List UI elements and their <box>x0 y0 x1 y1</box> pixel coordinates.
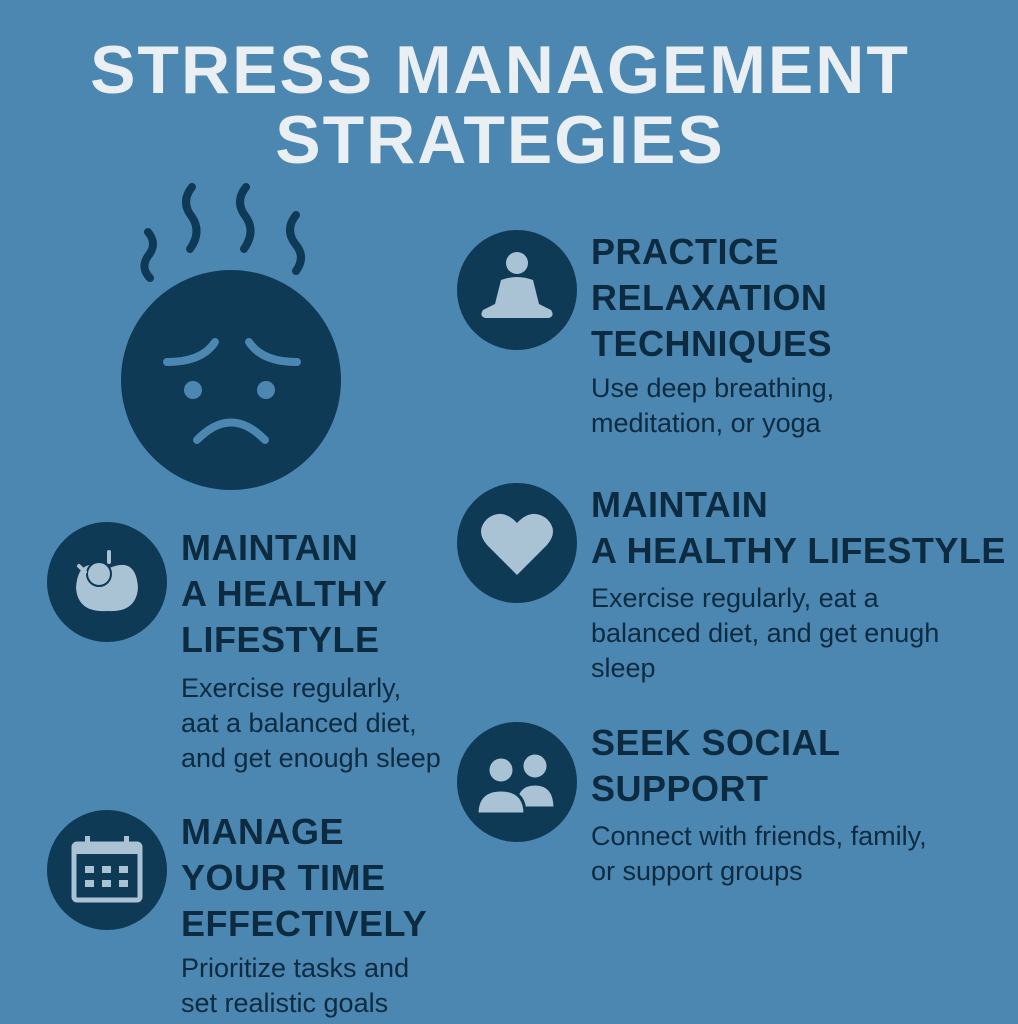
heading: TECHNIQUES <box>591 323 832 364</box>
heading: EFFECTIVELY <box>181 903 427 944</box>
icon: apple <box>47 522 167 642</box>
description: sleep <box>591 653 656 683</box>
description: balanced diet, and get enugh <box>591 618 939 648</box>
heading <box>181 527 388 660</box>
heading: SEEK SOCIAL <box>591 722 841 763</box>
icon: people <box>457 722 577 842</box>
title: STRATEGIES <box>275 102 725 178</box>
heading <box>181 811 427 944</box>
heading: PRACTICE <box>591 231 779 272</box>
heading: SUPPORT <box>591 768 769 809</box>
heading: A HEALTHY LIFESTYLE <box>591 530 1006 571</box>
heading: LIFESTYLE <box>181 619 380 660</box>
heading <box>591 722 841 809</box>
heading: A HEALTHY <box>181 573 388 614</box>
description: Use deep breathing, <box>591 373 834 403</box>
description: Exercise regularly, eat a <box>591 583 879 613</box>
description: Connect with friends, family, <box>591 821 927 851</box>
heading: MANAGE <box>181 811 344 852</box>
section: healthy lifestyle left <box>181 527 441 773</box>
description <box>591 821 927 886</box>
title <box>90 32 910 178</box>
description <box>591 373 834 438</box>
section: healthy lifestyle right <box>591 484 1006 683</box>
description: or support groups <box>591 856 803 886</box>
description: meditation, or yoga <box>591 408 821 438</box>
description <box>591 583 939 683</box>
icon: stressed face <box>121 183 341 490</box>
section: practice relaxation <box>591 231 834 438</box>
section: manage time <box>181 811 427 1018</box>
heading <box>591 484 1006 571</box>
description <box>181 673 441 773</box>
description: set realistic goals <box>181 988 388 1018</box>
description: and get enough sleep <box>181 743 441 773</box>
heading <box>591 231 832 364</box>
description: aat a balanced diet, <box>181 708 417 738</box>
icon: meditation <box>457 230 577 350</box>
section: social support <box>591 722 927 886</box>
title: STRESS MANAGEMENT <box>90 32 910 108</box>
heading: RELAXATION <box>591 277 827 318</box>
description <box>181 953 409 1018</box>
description: Exercise regularly, <box>181 673 401 703</box>
heading: MAINTAIN <box>591 484 768 525</box>
description: Prioritize tasks and <box>181 953 409 983</box>
heading: YOUR TIME <box>181 857 386 898</box>
icon: calendar <box>47 810 167 930</box>
icon: heart <box>457 483 577 603</box>
heading: MAINTAIN <box>181 527 358 568</box>
